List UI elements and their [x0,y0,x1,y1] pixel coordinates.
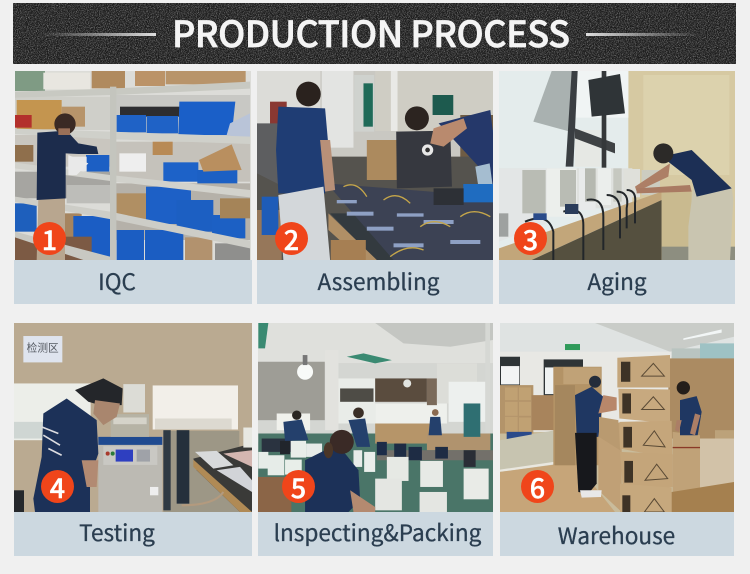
badge: 6: 6 [530,467,545,506]
panel: Assembling [257,71,493,304]
label: Inspecting&Packing: lnspecting&Packing [274,515,481,548]
badge: 1 [33,222,66,255]
label: Warehouse: Warehouse [558,518,675,551]
photo: factory floor packing [258,323,493,512]
label: IQC [14,260,252,304]
photo: workers assembling boards [257,71,493,260]
label: Testing [14,512,252,556]
badge: 4: 4 [50,467,65,506]
badge: 1: 1 [42,219,57,258]
panel: IQC [14,71,252,304]
label: IQC: IQC [98,264,136,297]
badge: 6 [521,470,554,503]
badge: 2 [275,222,308,255]
panel: Aging [499,71,735,304]
label: Assembling: Assembling [317,264,440,297]
badge: 3 [514,222,547,255]
photo: aging test room [499,71,735,260]
photo: technician at test bench [14,323,252,512]
label: Aging: Aging [587,264,647,297]
panel: Warehouse [500,323,734,556]
photo: warehouse cartons [500,323,734,512]
label: Aging [499,260,735,304]
title banner [13,3,736,64]
badge: 2: 2 [284,219,299,258]
label: Testing: Testing [79,515,155,548]
photo: man at warehouse shelves [15,71,251,260]
title banner: PRODUCTION PROCESS [172,6,570,58]
label: Warehouse [500,512,734,556]
badge: 4 [41,470,74,503]
badge: 3: 3 [523,219,538,258]
sign: 检测区 [23,336,62,362]
panel: Inspecting & Packing [258,323,493,556]
label: Assembling [257,260,493,304]
panel: Testing [14,323,252,556]
badge: 5 [282,470,315,503]
badge: 5: 5 [291,467,306,506]
label: Inspecting&Packing [258,512,493,556]
sign: 检测区: 检测区 [27,341,59,356]
